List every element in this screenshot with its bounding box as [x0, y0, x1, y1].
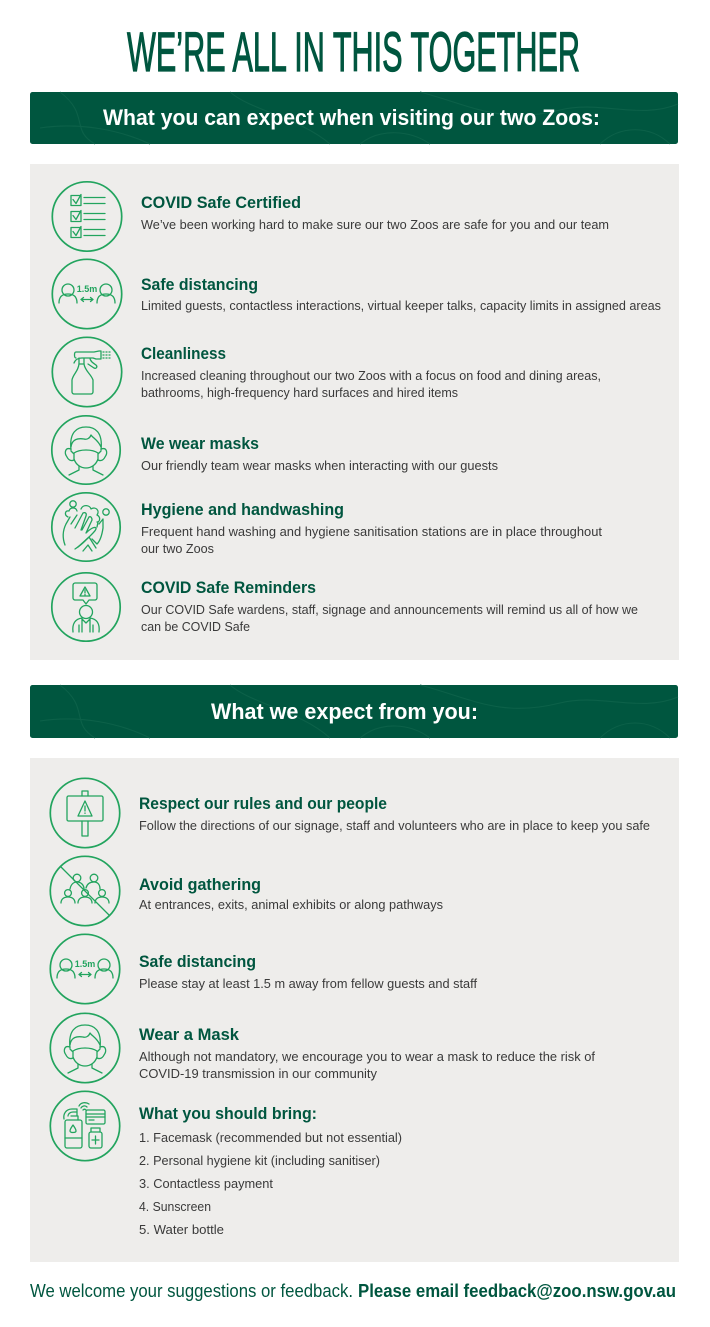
item: Avoid gathering: Avoid gathering: [139, 876, 261, 894]
item: We wear masks: [141, 435, 498, 473]
icon: checklist: [52, 182, 122, 251]
icon: warning sign: [50, 778, 120, 848]
item: COVID Safe Certified: COVID Safe Certified: [141, 194, 301, 212]
icon: safe distancing: 1.5m: [75, 959, 95, 969]
list: items to bring: 4. Sunscreen: [139, 1200, 211, 1214]
banner: what we expect: [30, 685, 678, 738]
icon: team mask: [52, 416, 120, 484]
icon: guest mask: [50, 1013, 120, 1083]
list: items to bring: 5. Water bottle: [139, 1223, 224, 1237]
icon: spray bottle: [52, 337, 122, 407]
item: We wear masks: Our friendly team wear masks when interacting with our guests: [141, 459, 498, 473]
item: Safe distancing: [139, 953, 478, 991]
list: items to bring: [139, 1131, 402, 1237]
icon: avoid gathering: [50, 856, 120, 926]
item: Wear a Mask: Although not mandatory, we encourage you to wear a mask to reduce the risk of: [139, 1050, 596, 1064]
item: Hygiene and handwashing: [141, 501, 603, 556]
banner heading: What we expect from you:: [211, 699, 478, 724]
item: Respect our rules: [139, 795, 650, 833]
icon: handwashing: [52, 493, 120, 561]
banner heading: What you can expect when visiting our two Zoos:: [103, 105, 600, 130]
item: Safe distancing: Please stay at least 1.5 m away from fellow guests and staff: [139, 977, 478, 991]
panel: what guests should do: [30, 758, 679, 1262]
icon: reminder warden: [52, 573, 120, 641]
footer: Please email feedback@zoo.nsw.gov.au: [358, 1281, 676, 1301]
item: Safe distancing: Limited guests, contactless interactions, virtual keeper talks, capacity limits in assigned areas: [141, 299, 661, 313]
item: Safe distancing: [141, 276, 661, 313]
item: We wear masks: We wear masks: [141, 435, 259, 453]
item: Respect our rules: Respect our rules and our people: [139, 795, 387, 813]
item: what you should bring: [139, 1105, 402, 1237]
item: COVID Safe Reminders: [141, 579, 638, 634]
item: Cleanliness: [141, 345, 601, 400]
item: Cleanliness: Increased cleaning throughout our two Zoos with a focus on food and dining areas,: [141, 369, 601, 383]
item: Wear a Mask: Wear a Mask: [139, 1026, 240, 1044]
item: Hygiene and handwashing: our two Zoos: [141, 542, 214, 556]
panel: what zoos provide: [30, 164, 679, 660]
item: Safe distancing: Safe distancing: [139, 953, 256, 971]
footer: [30, 1281, 676, 1301]
icon: safe distancing: 1.5m: [77, 284, 97, 294]
item: Avoid gathering: [139, 876, 443, 912]
list: items to bring: 2. Personal hygiene kit (including sanitiser): [139, 1154, 380, 1168]
banner: what you can expect: [30, 92, 678, 144]
footer: We welcome your suggestions or feedback.: [30, 1281, 353, 1301]
item: Cleanliness: bathrooms, high-frequency hard surfaces and hired items: [141, 386, 458, 400]
item: COVID Safe Reminders: Our COVID Safe wardens, staff, signage and announcements will remind us all of how we: [141, 603, 638, 617]
item: Respect our rules: Follow the directions of our signage, staff and volunteers who are in place to keep you safe: [139, 819, 650, 833]
icon: safe distancing: [52, 259, 122, 329]
item: what you should bring: What you should bring:: [139, 1105, 317, 1123]
item: Wear a Mask: [139, 1026, 596, 1081]
list: items to bring: 3. Contactless payment: [139, 1177, 274, 1191]
item: Safe distancing: Safe distancing: [141, 276, 258, 294]
item: COVID Safe Certified: [141, 194, 609, 232]
list: items to bring: 1. Facemask (recommended but not essential): [139, 1131, 402, 1145]
item: Hygiene and handwashing: Frequent hand washing and hygiene sanitisation stations are in place throughout: [141, 525, 603, 539]
item: Hygiene and handwashing: Hygiene and handwashing: [141, 501, 344, 519]
item: COVID Safe Reminders: can be COVID Safe: [141, 620, 250, 634]
icon: safe distancing: [50, 934, 120, 1004]
icon: items to bring: [50, 1091, 120, 1161]
item: Wear a Mask: COVID-19 transmission in our community: [139, 1067, 378, 1081]
item: COVID Safe Certified: We’ve been working hard to make sure our two Zoos are safe for you and our team: [141, 218, 609, 232]
item: Avoid gathering: At entrances, exits, animal exhibits or along pathways: [139, 898, 443, 912]
item: Cleanliness: Cleanliness: [141, 345, 226, 363]
item: COVID Safe Reminders: COVID Safe Reminders: [141, 579, 316, 597]
